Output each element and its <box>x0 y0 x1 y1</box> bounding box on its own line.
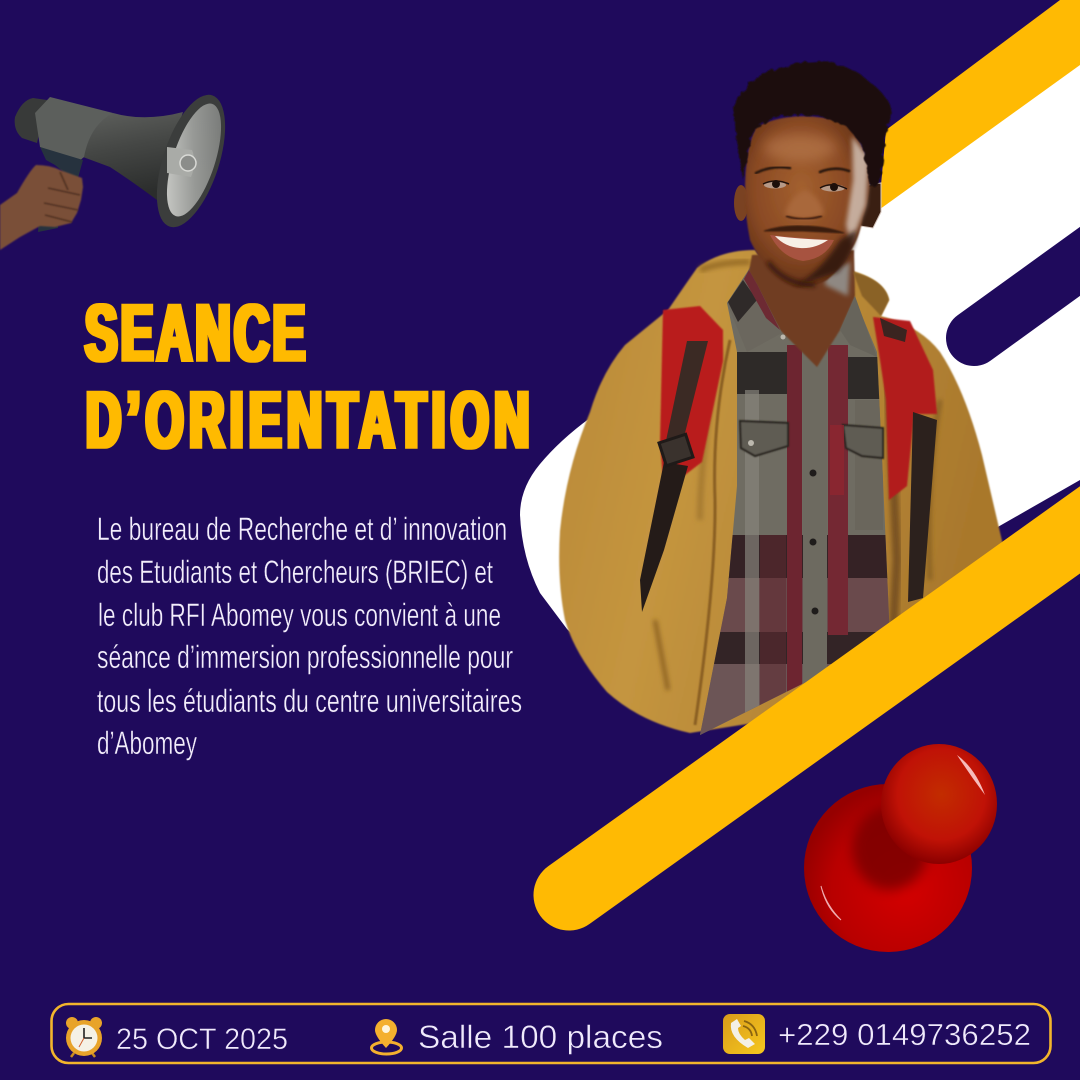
pin head <box>881 744 997 864</box>
description paragraph: d’Abomey <box>97 725 197 761</box>
student photo illustration <box>559 61 1003 750</box>
description paragraph: tous les étudiants du centre universitaires <box>97 683 522 719</box>
right ear <box>860 183 881 228</box>
red push pin <box>804 744 997 952</box>
megaphone grip <box>38 200 58 232</box>
finger lines <box>44 172 80 222</box>
title line 1: SEANCE <box>85 289 305 379</box>
icon: phone <box>723 1014 765 1054</box>
eyebrows <box>756 167 849 173</box>
navy pill cut-out <box>974 218 1080 338</box>
description paragraph: Le bureau de Recherche et d’ innovation <box>97 511 507 547</box>
left collar <box>727 270 782 352</box>
white diagonal shape <box>520 65 1080 680</box>
date: 25 OCT 2025 <box>116 1023 288 1056</box>
hand <box>0 165 83 250</box>
pin base <box>804 784 972 952</box>
goatee shadow <box>768 262 815 285</box>
pin highlights <box>821 755 985 920</box>
description paragraph <box>97 511 522 761</box>
megaphone body <box>35 97 113 162</box>
description paragraph: le club RFI Abomey vous convient à une <box>98 597 501 633</box>
face <box>745 116 870 288</box>
footer info bar <box>52 1004 1050 1063</box>
forehead glow <box>764 134 836 162</box>
title <box>85 289 529 466</box>
megaphone driver <box>167 147 194 177</box>
left backpack strap <box>640 306 723 612</box>
neck highlight <box>825 262 850 296</box>
right collar <box>840 296 877 357</box>
megaphone inner cone <box>156 97 232 223</box>
phone number: +229 0149736252 <box>778 1017 1031 1052</box>
hair <box>733 61 892 187</box>
jaw shadow <box>795 230 856 286</box>
nose <box>785 190 824 219</box>
plaid shirt <box>700 267 890 735</box>
left ear <box>734 185 748 221</box>
icon: alarm clock <box>66 1017 102 1057</box>
mouth <box>770 235 834 261</box>
upper yellow diagonal band <box>878 0 1080 218</box>
jacket <box>559 250 1003 733</box>
megaphone rim <box>143 87 239 235</box>
lower yellow diagonal pill <box>569 487 1080 895</box>
title line 2: D’ORIENTATION <box>86 376 529 466</box>
footer border <box>52 1004 1050 1063</box>
megaphone with hand <box>0 87 239 250</box>
shirt buttons <box>748 334 818 614</box>
neck and chest skin <box>748 250 855 367</box>
eyes <box>763 180 847 192</box>
right backpack strap <box>873 317 937 602</box>
cheek highlight <box>846 136 869 245</box>
shirt pockets <box>740 421 883 495</box>
location: Salle 100 places <box>418 1019 663 1055</box>
megaphone rear cap <box>15 98 47 143</box>
description paragraph: des Etudiants et Chercheurs (BRIEC) et <box>97 554 493 590</box>
icon: location pin <box>372 1019 402 1054</box>
megaphone handle <box>40 147 83 178</box>
description paragraph: séance d’immersion professionnelle pour <box>97 639 513 675</box>
jacket shading <box>655 262 940 725</box>
megaphone horn <box>83 112 183 200</box>
hood collar right <box>853 272 889 316</box>
pin stem shadow <box>852 806 928 890</box>
moustache <box>764 226 844 233</box>
